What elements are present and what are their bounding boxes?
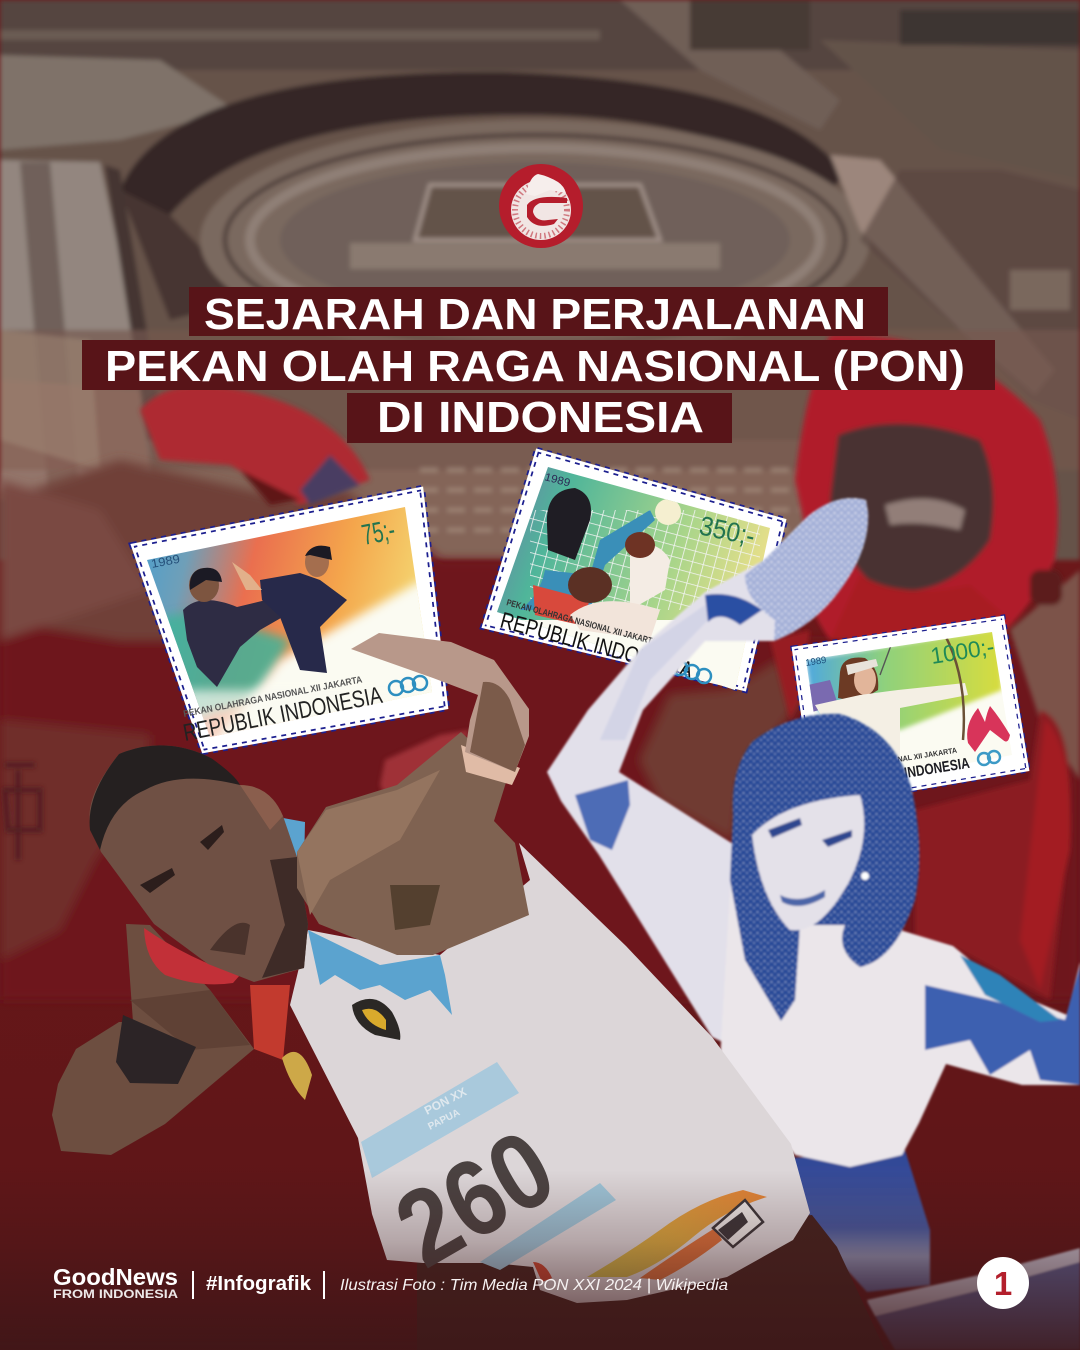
face: [752, 795, 869, 930]
title line 2: PEKAN OLAH RAGA NASIONAL (PON): [105, 342, 965, 391]
thumb: [470, 682, 525, 772]
stamp: archery 1000: [793, 617, 1028, 806]
background photo: stadium: [0, 0, 1080, 560]
stamp value: 1000;-: [929, 633, 996, 669]
stamp emblem: [967, 706, 1010, 765]
stamp year: 1989: [805, 655, 827, 669]
sponsor print: [533, 1190, 767, 1282]
blue fringe: [283, 818, 452, 1015]
stamp event name: PEKAN OLAHRAGA NASIONAL XII JAKARTA: [182, 674, 363, 720]
stamp country name: REPUBLIK INDONESIA: [181, 682, 384, 747]
background photo: dark red torso area: [0, 460, 1080, 1000]
raised arm: [297, 732, 529, 955]
background figure: boxer with left red helmet: [5, 386, 470, 860]
stamp country name: REPUBLIK INDONESIA: [498, 607, 696, 683]
title line 3: DI INDONESIA: [377, 393, 704, 442]
raised arm and paddle: [547, 498, 868, 1060]
raised hand: [351, 633, 529, 772]
chest badge: [352, 999, 400, 1040]
stamp value: 75;-: [359, 514, 398, 552]
wrist band: [116, 1015, 196, 1084]
title line 1: SEJARAH DAN PERJALANAN: [204, 290, 866, 339]
bib: PON XX: [422, 1085, 469, 1118]
shot put ball: [144, 928, 240, 984]
figure: shot putter athlete: [52, 633, 885, 1350]
page number badge: 1: [994, 1265, 1012, 1302]
hair: [730, 714, 919, 1021]
singlet: [250, 843, 810, 1303]
lower dark shorts: [417, 1215, 885, 1350]
stamp year: 1989: [150, 552, 181, 571]
left forearm: [52, 924, 254, 1155]
footer gradient: [0, 1170, 1080, 1350]
figure: table tennis player in blue tint: [547, 498, 1080, 1350]
stamp value: 350;-: [697, 511, 758, 552]
stamp emblem: [389, 676, 427, 695]
stamp: pencak silat 75: [130, 488, 450, 760]
stamp event name: NAL XII JAKARTA: [897, 746, 958, 764]
logo: red circle with eagle G: [499, 164, 583, 248]
bib: PAPUA: [426, 1107, 462, 1133]
stamp emblem: [673, 661, 711, 683]
stamp: volleyball 350: [470, 450, 790, 690]
footer: brand logotype: [53, 1264, 178, 1301]
wrist band on raised arm: [461, 745, 520, 785]
title block: [82, 287, 995, 443]
bottom right blue shape: [867, 1248, 1080, 1350]
footer: photo credit: Ilustrasi Foto : Tim Media PON XXI 2024 | Wikipedia: [340, 1277, 728, 1294]
stamp event name: PEKAN OLAHRAGA NASIONAL XII JAKARTA: [505, 597, 658, 647]
background figure: boxer with right red helmet: [770, 335, 1080, 1000]
footer: brand logotype: FROM INDONESIA: [53, 1287, 178, 1301]
stamp country name: INDONESIA: [903, 755, 971, 782]
lower body: [790, 1150, 930, 1292]
torso and outstretched arm: [720, 840, 1080, 1167]
figure: kicking fighter: [183, 600, 280, 687]
stamp year: 1989: [543, 471, 571, 490]
page number badge: [977, 1257, 1029, 1309]
figure: standing fighter: [260, 573, 347, 673]
footer: hashtag: #Infografik: [206, 1273, 312, 1295]
bib: 260: [376, 1106, 573, 1290]
footer: brand logotype: GoodNews: [53, 1264, 178, 1290]
head: [90, 745, 308, 982]
